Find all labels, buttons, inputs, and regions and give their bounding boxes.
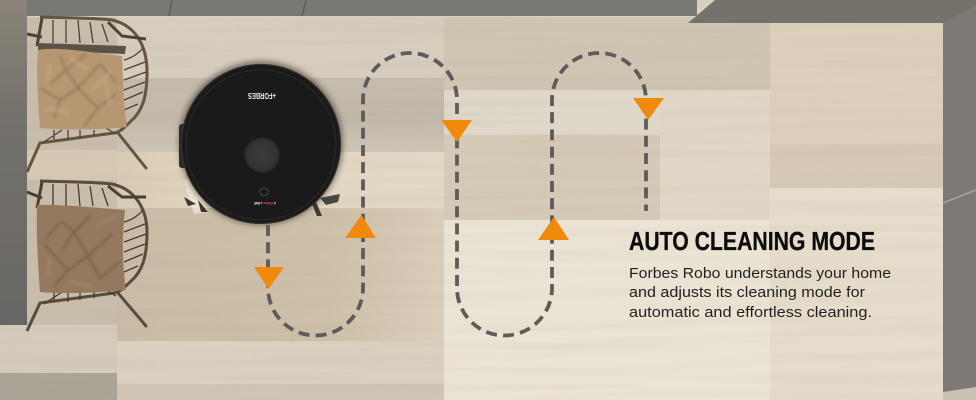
arrow 1 down	[254, 267, 284, 289]
right wall	[943, 5, 976, 400]
left wall	[0, 0, 27, 325]
chair: lower	[27, 181, 147, 331]
arrow 4 up	[538, 217, 569, 240]
cushion: lower	[37, 205, 126, 293]
arrow 3 down	[441, 120, 472, 142]
robot center cap	[244, 138, 280, 172]
top wall	[27, 0, 976, 23]
robot vacuum	[179, 61, 343, 225]
description text: automatic and effortless cleaning.	[629, 304, 872, 321]
description text	[629, 265, 891, 321]
robot small label: 1 Robo LINE	[254, 201, 276, 206]
description text: and adjusts its cleaning mode for	[629, 284, 865, 301]
robot logo: +FORBES	[248, 91, 276, 101]
chair: upper	[27, 17, 147, 172]
cleaning path	[268, 53, 646, 336]
heading: AUTO CLEANING MODE	[629, 228, 875, 256]
robot side brushes	[184, 176, 340, 216]
arrow 2 up	[345, 215, 376, 238]
cushion: upper	[37, 43, 127, 129]
description text: Forbes Robo understands your home	[629, 265, 891, 282]
arrow 5 down	[633, 98, 664, 120]
robot power button	[260, 188, 268, 196]
